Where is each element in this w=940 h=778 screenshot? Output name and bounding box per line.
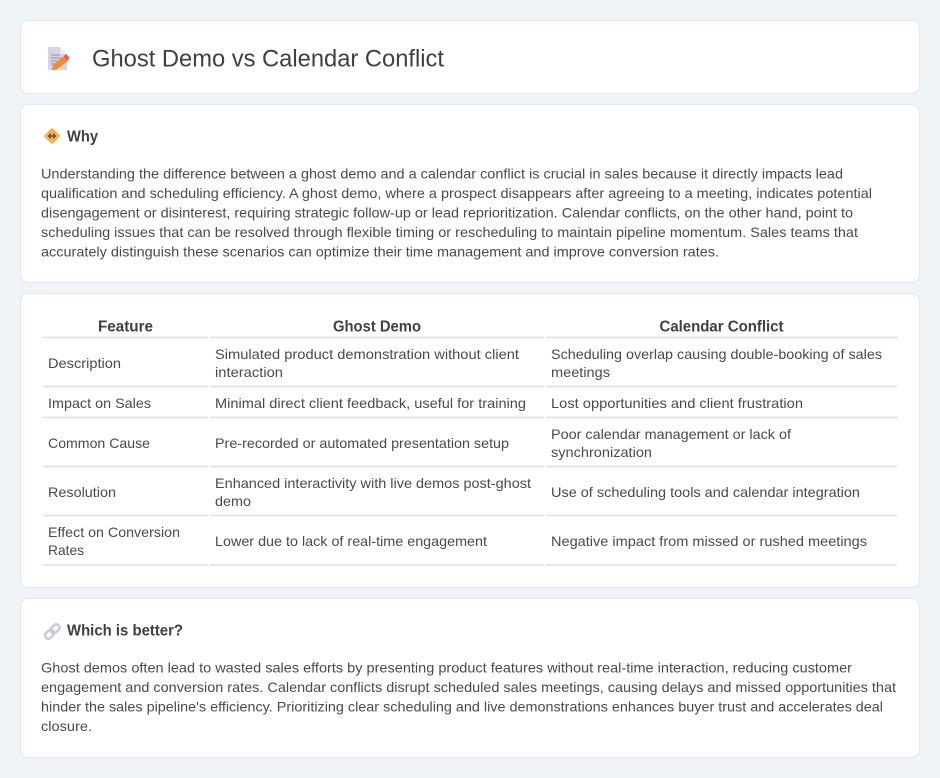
text block: why paragraph: accurately distinguish these scenarios can optimize their time management and improve conversion rates. <box>41 244 719 260</box>
row: resolution <box>48 475 860 509</box>
panel: comparison table <box>20 294 920 588</box>
row: effect on conversion rates: Lower due to lack of real-time engagement <box>215 533 487 549</box>
row: resolution: Enhanced interactivity with live demos post-ghost <box>215 475 531 491</box>
row: common cause <box>48 426 791 460</box>
text block: which is better paragraph: engagement and conversion rates. Calendar conflicts disrupt scheduled sales meetings, causing delays and missed opportunities that <box>41 679 896 695</box>
text block: which is better paragraph <box>41 660 896 734</box>
row: resolution: demo <box>215 493 251 509</box>
row: common cause: synchronization <box>551 444 652 460</box>
table header <box>98 318 784 336</box>
text block: why paragraph: disengagement or disinterest, requiring strategic follow-up or lead reprioritization. Calendar conflicts, on the other hand, point to <box>41 204 853 220</box>
table header: Ghost Demo <box>333 318 421 336</box>
row: impact on sales: Minimal direct client feedback, useful for training <box>215 395 526 411</box>
panel: why <box>20 104 920 282</box>
text block: why paragraph <box>41 166 872 260</box>
row: resolution: Use of scheduling tools and calendar integration <box>551 484 860 500</box>
row: description: interaction <box>215 364 283 380</box>
text block: which is better paragraph: Ghost demos often lead to wasted sales efforts by presenting product features without real-time interaction, reducing customer <box>41 660 852 676</box>
heading: which is better: Which is better? <box>67 622 183 640</box>
row: impact on sales: Impact on Sales <box>48 395 151 411</box>
text block: which is better paragraph: hinder the sales pipeline's efficiency. Prioritizing clear scheduling and live demonstrations enhances buyer trust and accelerates deal <box>41 698 883 714</box>
row: impact on sales <box>48 395 803 411</box>
icon: link <box>44 623 61 640</box>
row: description: Description <box>48 355 121 371</box>
row: effect on conversion rates: Rates <box>48 542 84 558</box>
row: resolution: Resolution <box>48 484 116 500</box>
row: effect on conversion rates: Negative impact from missed or rushed meetings <box>551 533 867 549</box>
panel: which is better <box>20 598 920 758</box>
text block: why paragraph: qualification and scheduling efficiency. A ghost demo, where a prospect disappears after agreeing to a meeting, indicates potential <box>41 185 872 201</box>
row: description <box>48 346 882 380</box>
heading: why: Why <box>67 128 98 146</box>
icon: warning diamond <box>44 128 60 144</box>
row: description: Scheduling overlap causing double-booking of sales <box>551 346 882 362</box>
row: description: meetings <box>551 364 610 380</box>
row: effect on conversion rates: Effect on Conversion <box>48 524 180 540</box>
row: common cause: Pre-recorded or automated presentation setup <box>215 435 509 451</box>
panel: header <box>20 20 920 94</box>
row: description: Simulated product demonstration without client <box>215 346 519 362</box>
text block: why paragraph: Understanding the difference between a ghost demo and a calendar conflict is crucial in sales because it directly impacts lead <box>41 166 843 182</box>
title: Ghost Demo vs Calendar Conflict <box>92 46 444 72</box>
row: impact on sales: Lost opportunities and client frustration <box>551 395 803 411</box>
row: common cause: Common Cause <box>48 435 150 451</box>
icon: document with pencil <box>48 47 70 70</box>
table header: Calendar Conflict <box>660 318 784 336</box>
text block: which is better paragraph: closure. <box>41 718 92 734</box>
text block: why paragraph: scheduling issues that can be resolved through flexible timing or rescheduling to maintain pipeline momentum. Sales teams that <box>41 224 858 240</box>
row: effect on conversion rates <box>48 524 867 558</box>
row: common cause: Poor calendar management or lack of <box>551 426 791 442</box>
table header: Feature <box>98 318 153 336</box>
